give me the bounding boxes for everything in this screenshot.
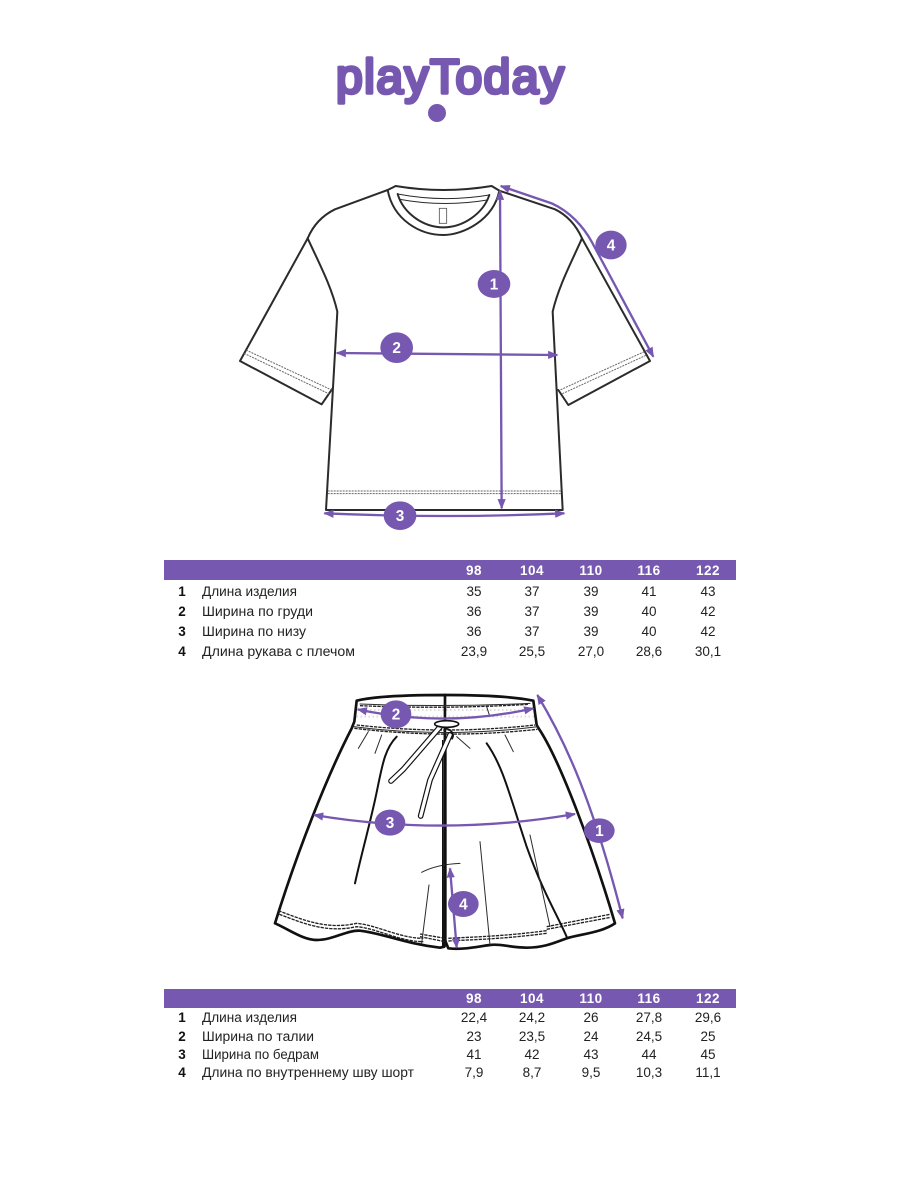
row 2: 2 (178, 604, 186, 619)
row 1: 1 (178, 584, 186, 599)
row 1: 29,6 (695, 1010, 721, 1025)
table header: 122 (696, 563, 720, 578)
row 1: 1 (178, 1010, 186, 1025)
row 4: 30,1 (695, 644, 721, 659)
arrow 4: inseam length (448, 868, 479, 948)
row 2: Ширина по талии (202, 1029, 314, 1044)
row 2: 24 (583, 1029, 599, 1044)
row 2: 42 (700, 604, 716, 619)
arrow 2: waist width: 2 (392, 707, 400, 724)
arrow 2: chest width (337, 332, 557, 363)
row 4: 27,0 (578, 644, 604, 659)
row 3: 3 (178, 624, 186, 639)
row 4: 28,6 (636, 644, 662, 659)
table header: 122 (696, 991, 720, 1006)
row 1: 35 (466, 584, 482, 599)
row 1: 26 (583, 1010, 599, 1025)
table header (164, 560, 736, 580)
row 3: 42 (700, 624, 716, 639)
row 3: 36 (466, 624, 482, 639)
arrow 2: chest width: 2 (392, 340, 401, 357)
arrow 2: waist width (358, 700, 533, 728)
row 4: 4 (178, 644, 186, 659)
panel: shorts diagram (275, 695, 623, 949)
row 1: 27,8 (636, 1010, 662, 1025)
table header: 116 (637, 563, 661, 578)
arrow 4: sleeve length with shoulder (501, 186, 653, 357)
row 1: Длина изделия (202, 1010, 297, 1025)
table header: 98 (466, 991, 482, 1006)
row 3: Ширина по бедрам (202, 1047, 319, 1062)
arrow 4: sleeve length with shoulder: 4 (607, 237, 616, 254)
arrow 3: hem width (324, 501, 564, 530)
arrow 1: garment length: 1 (490, 276, 499, 293)
row 3: 44 (641, 1047, 657, 1062)
row 4: Длина по внутреннему шву шорт (202, 1065, 414, 1080)
row 2: 24,5 (636, 1029, 662, 1044)
row 3: 41 (466, 1047, 482, 1062)
row 1: 39 (583, 584, 599, 599)
row 3 (178, 624, 716, 639)
row 3: 3 (178, 1047, 186, 1062)
row 4: 7,9 (465, 1065, 483, 1080)
table header: 104 (520, 563, 544, 578)
t-shirt outline (240, 186, 650, 510)
row 4 (178, 644, 721, 659)
shorts outline (275, 695, 615, 949)
panel: t-shirt diagram (240, 186, 653, 530)
row 2 (178, 604, 716, 619)
arrow 1: garment length: 1 (595, 823, 604, 840)
row 4: 25,5 (519, 644, 545, 659)
arrow 1: garment length (537, 695, 623, 918)
row 4: 10,3 (636, 1065, 662, 1080)
row 1: 37 (524, 584, 540, 599)
table: shorts sizes (164, 989, 736, 1080)
arrow 3: hip width: 3 (386, 815, 394, 832)
row 3: 43 (583, 1047, 599, 1062)
row 2: 40 (641, 604, 657, 619)
row 4 (178, 1065, 721, 1080)
row 1: 41 (641, 584, 657, 599)
row 4: Длина рукава с плечом (202, 644, 355, 659)
row 2 (178, 1029, 716, 1044)
row 1 (178, 1010, 721, 1025)
row 2: 36 (466, 604, 482, 619)
arrow 1: garment length (478, 191, 510, 508)
row 4: 11,1 (695, 1065, 721, 1080)
table header: 104 (520, 991, 544, 1006)
table: t-shirt sizes (164, 560, 736, 659)
row 3: 42 (524, 1047, 540, 1062)
row 2: 23,5 (519, 1029, 545, 1044)
row 4: 8,7 (523, 1065, 541, 1080)
row 2: 37 (524, 604, 540, 619)
row 2: 39 (583, 604, 599, 619)
row 2: 2 (178, 1029, 186, 1044)
table header: 110 (579, 991, 603, 1006)
row 3: 39 (583, 624, 599, 639)
row 3: 37 (524, 624, 540, 639)
row 1 (178, 584, 716, 599)
arrow 3: hem width: 3 (396, 508, 404, 525)
arrow 4: inseam length: 4 (459, 896, 468, 913)
table header: 116 (637, 991, 661, 1006)
table header (164, 989, 736, 1008)
row 1: 24,2 (519, 1010, 545, 1025)
row 2: 23 (466, 1029, 482, 1044)
arrow 3: hip width (314, 810, 575, 836)
logo: playToday: playToday (336, 51, 564, 104)
table header: 110 (579, 563, 603, 578)
row 4: 9,5 (582, 1065, 600, 1080)
row 1: Длина изделия (202, 584, 297, 599)
row 4: 23,9 (461, 644, 487, 659)
row 2: 25 (700, 1029, 716, 1044)
row 3: Ширина по низу (202, 624, 306, 639)
table header: 98 (466, 563, 482, 578)
row 3: 45 (700, 1047, 716, 1062)
row 3 (178, 1047, 716, 1062)
row 1: 22,4 (461, 1010, 488, 1025)
row 3: 40 (641, 624, 657, 639)
row 4: 4 (178, 1065, 186, 1080)
row 1: 43 (700, 584, 716, 599)
row 2: Ширина по груди (202, 604, 313, 619)
